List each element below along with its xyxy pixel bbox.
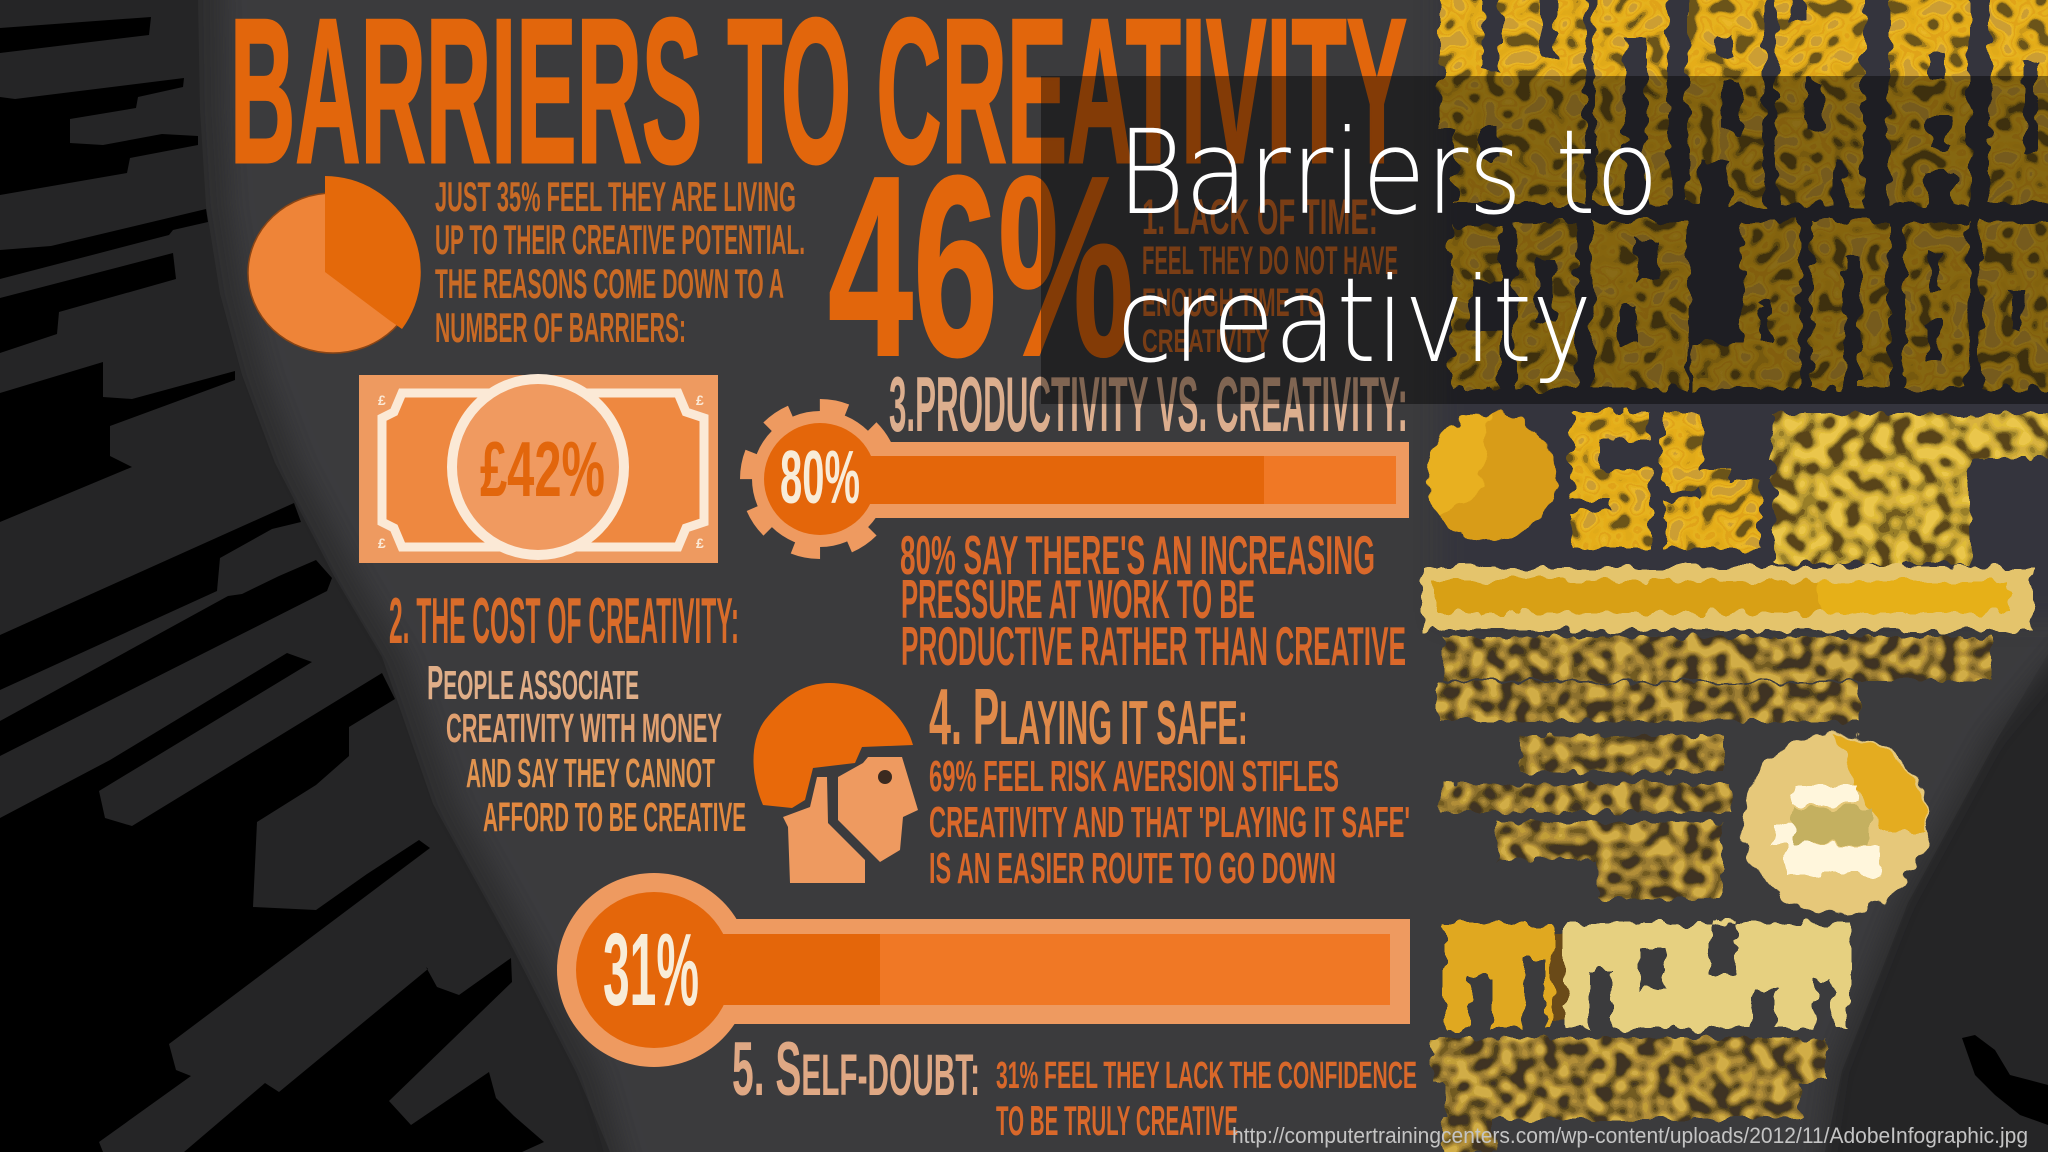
pie chart icon: [248, 176, 421, 353]
section 1: lack of time: FEEL THEY DO NOT HAVE: [1142, 239, 1398, 283]
section 4: playing it safe: CREATIVITY AND THAT 'PLAYING IT SAFE': [929, 798, 1410, 847]
mosaic: upper right text block: [1772, 414, 2048, 563]
helmet head icon: [753, 683, 918, 883]
mosaic: headline row: [1445, 920, 1850, 1028]
big 46 percent: 46%: [828, 123, 1134, 410]
slide heading: [1117, 104, 1659, 389]
text: UP TO THEIR CREATIVE POTENTIAL.: [435, 216, 805, 263]
section 1: lack of time: ENOUGH TIME TO: [1142, 281, 1324, 325]
section 2: cost of creativity: [389, 584, 746, 840]
dark title band overlay: [1041, 76, 2048, 404]
section 2: cost of creativity: AND SAY THEY CANNOT: [466, 750, 715, 796]
text: PRODUCTIVE RATHER THAN CREATIVE: [901, 615, 1406, 677]
section 2: cost of creativity: AFFORD TO BE CREATIVE: [483, 794, 746, 840]
section 3 text: 80% SAY THERE'S AN INCREASING: [900, 524, 1375, 586]
mosaic: sun badge: [1427, 413, 1555, 541]
intro text: [435, 173, 805, 351]
thermometer bar 31 percent: [557, 873, 1410, 1067]
banknote icon with 42 percent: £: [696, 535, 704, 551]
mosaic: progress bar: [1422, 567, 2033, 630]
section 5: self-doubt: TO BE TRULY CREATIVE: [996, 1097, 1238, 1144]
intro text: THE REASONS COME DOWN TO A: [435, 260, 784, 307]
section 5: self-doubt: [732, 1027, 1417, 1144]
section 1: lack of time: 1. LACK OF TIME:: [1142, 189, 1378, 245]
section 3 text: [900, 524, 1406, 677]
mosaic: round pale badge: [1743, 733, 1927, 913]
intro text: JUST 35% FEEL THEY ARE LIVING: [435, 173, 796, 220]
banknote icon with 42 percent: £: [378, 392, 386, 408]
banknote icon with 42 percent: £: [378, 535, 386, 551]
gear progress bar 80 percent: [748, 407, 1409, 551]
section 4: playing it safe: 69% FEEL RISK AVERSION STIFLES: [929, 752, 1339, 801]
section 4: playing it safe: [929, 672, 1410, 893]
gear progress bar 80 percent: 80%: [780, 435, 860, 519]
slide heading: creativity: [1117, 252, 1592, 389]
mosaic: percent block: [1572, 412, 1760, 549]
slide heading: Barriers to: [1117, 104, 1659, 241]
intro text: NUMBER OF BARRIERS:: [435, 304, 686, 351]
source url: http://computertrainingcenters.com/wp-content/uploads/2012/11/AdobeInfographic.jpg: [1232, 1123, 2028, 1148]
section 5: self-doubt: 31% FEEL THEY LACK THE CONFIDENCE: [996, 1055, 1417, 1097]
section 4: playing it safe: IS AN EASIER ROUTE TO GO DOWN: [929, 844, 1336, 893]
section 4: playing it safe: 4. PLAYING IT SAFE:: [929, 672, 1248, 761]
mosaic: lower text rows: [1433, 637, 1991, 1152]
mosaic: top big rows: [1440, 0, 2048, 388]
banknote icon with 42 percent: £42%: [480, 425, 605, 513]
section 2: cost of creativity: CREATIVITY WITH MONEY: [446, 705, 722, 751]
banknote icon with 42 percent: [359, 375, 718, 563]
section 5: self-doubt: 5. SELF-DOUBT:: [732, 1027, 980, 1112]
section 2: cost of creativity: PEOPLE ASSOCIATE: [427, 657, 639, 710]
thermometer bar 31 percent: 31%: [603, 912, 699, 1027]
banknote icon with 42 percent: £: [696, 392, 704, 408]
section 1: lack of time: [1142, 189, 1398, 359]
section 1: lack of time: CREATIVITY: [1142, 323, 1270, 359]
section 3 text: PRESSURE AT WORK TO BE: [901, 568, 1255, 630]
text: 2. THE COST OF CREATIVITY:: [389, 584, 739, 657]
